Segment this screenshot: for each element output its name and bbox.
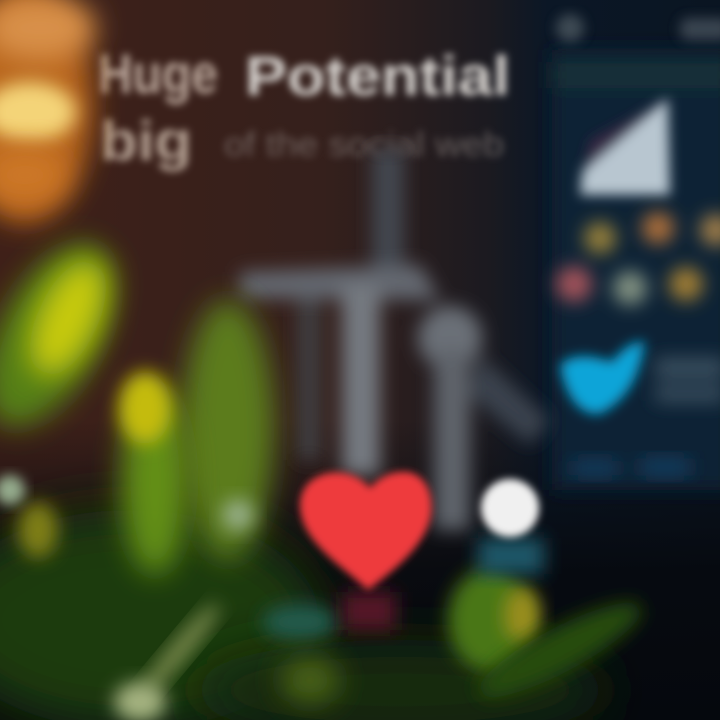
text block: subtitle: of the social web [224,126,504,164]
panel: dark social dashboard [552,50,720,490]
heading: title text: Potential [245,44,510,107]
heading: title text [98,42,510,172]
text block: bird caption [655,358,720,402]
chart: grey line structure [240,150,550,530]
text block: dashboard footer [572,458,690,476]
heading: title text: big [100,109,192,172]
icon: top right dots [556,14,720,42]
icon: blue bird [560,342,645,414]
heading: title text: Huge [98,42,218,105]
foliage: green leaves [0,223,652,720]
icon: red heart [300,472,432,630]
chart: light triangle [580,98,670,195]
icon grid: coloured dots [556,212,720,305]
icon: white circle [478,479,544,574]
icon: orange flower [0,0,96,223]
